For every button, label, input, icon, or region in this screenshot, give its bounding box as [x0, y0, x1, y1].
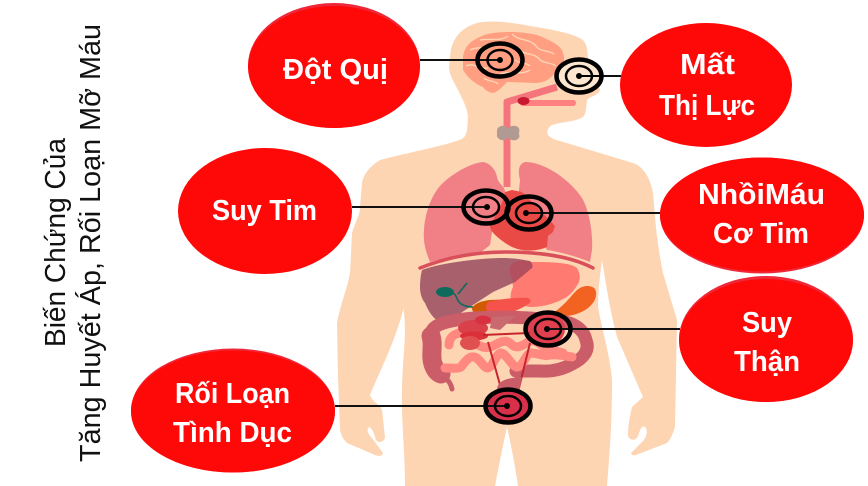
callout: Đột Quị — [248, 3, 420, 128]
connector: stroke — [420, 59, 500, 61]
callout: Mất Thị Lực — [620, 23, 792, 147]
target: bladder — [486, 390, 530, 422]
target: heart left — [464, 190, 508, 224]
callout: Rối Loạn Tình Dục: Tình Dục — [173, 417, 292, 449]
callout: Mất Thị Lực: Thị Lực — [659, 90, 755, 122]
connector: kidney — [548, 328, 680, 330]
oral cavity tube — [523, 100, 573, 106]
callout: Rối Loạn Tình Dục — [131, 348, 335, 472]
heart — [490, 190, 555, 251]
bladder — [485, 391, 529, 423]
duodenum — [458, 316, 515, 350]
callout: Đột Quị: Đột Quị — [283, 54, 388, 86]
target: brain — [478, 44, 522, 76]
spleen — [553, 286, 596, 316]
airway and throat — [507, 87, 557, 187]
callout: Suy Tim — [178, 148, 352, 274]
throat dot — [518, 97, 530, 105]
vertical title line 1: Biến Chứng Của — [40, 137, 72, 347]
stomach — [510, 262, 580, 307]
callout: Mất Thị Lực: Mất — [680, 49, 735, 81]
vertical title line 2: Tăng Huyết Áp, Rối Loạn Mỡ Máu — [74, 24, 107, 462]
connector: vision — [601, 75, 621, 77]
callout: NhồiMáu Cơ Tim: Cơ Tim — [713, 218, 809, 250]
brain — [463, 32, 564, 93]
callout: NhồiMáu Cơ Tim — [660, 158, 864, 274]
thyroid — [497, 126, 519, 140]
diaphragm — [420, 252, 593, 268]
liver and stomach overlap — [510, 260, 533, 283]
callout: Rối Loạn Tình Dục: Rối Loạn — [175, 378, 290, 410]
target: kidney — [526, 312, 570, 346]
callout: Suy Thận — [679, 276, 853, 402]
gallbladder — [436, 283, 473, 307]
right lung — [518, 162, 592, 262]
callout: Suy Thận: Thận — [734, 346, 800, 378]
pancreas — [472, 298, 531, 315]
kidney — [525, 312, 565, 346]
target: eye — [556, 60, 602, 92]
connector: sexual disorder — [335, 405, 508, 407]
connector: infarction — [529, 212, 660, 214]
body silhouette — [337, 22, 677, 486]
bladder back — [497, 377, 522, 392]
large intestine — [431, 317, 587, 389]
small intestine — [445, 333, 572, 368]
left lung — [424, 162, 505, 262]
ureter vessels — [483, 333, 530, 392]
liver — [420, 258, 532, 322]
callout: Suy Tim: Suy Tim — [212, 195, 317, 227]
callout: NhồiMáu Cơ Tim: NhồiMáu — [698, 179, 825, 211]
callout: Suy Thận: Suy — [742, 307, 792, 339]
connector: heart failure — [352, 206, 486, 208]
target: heart right — [506, 196, 552, 230]
